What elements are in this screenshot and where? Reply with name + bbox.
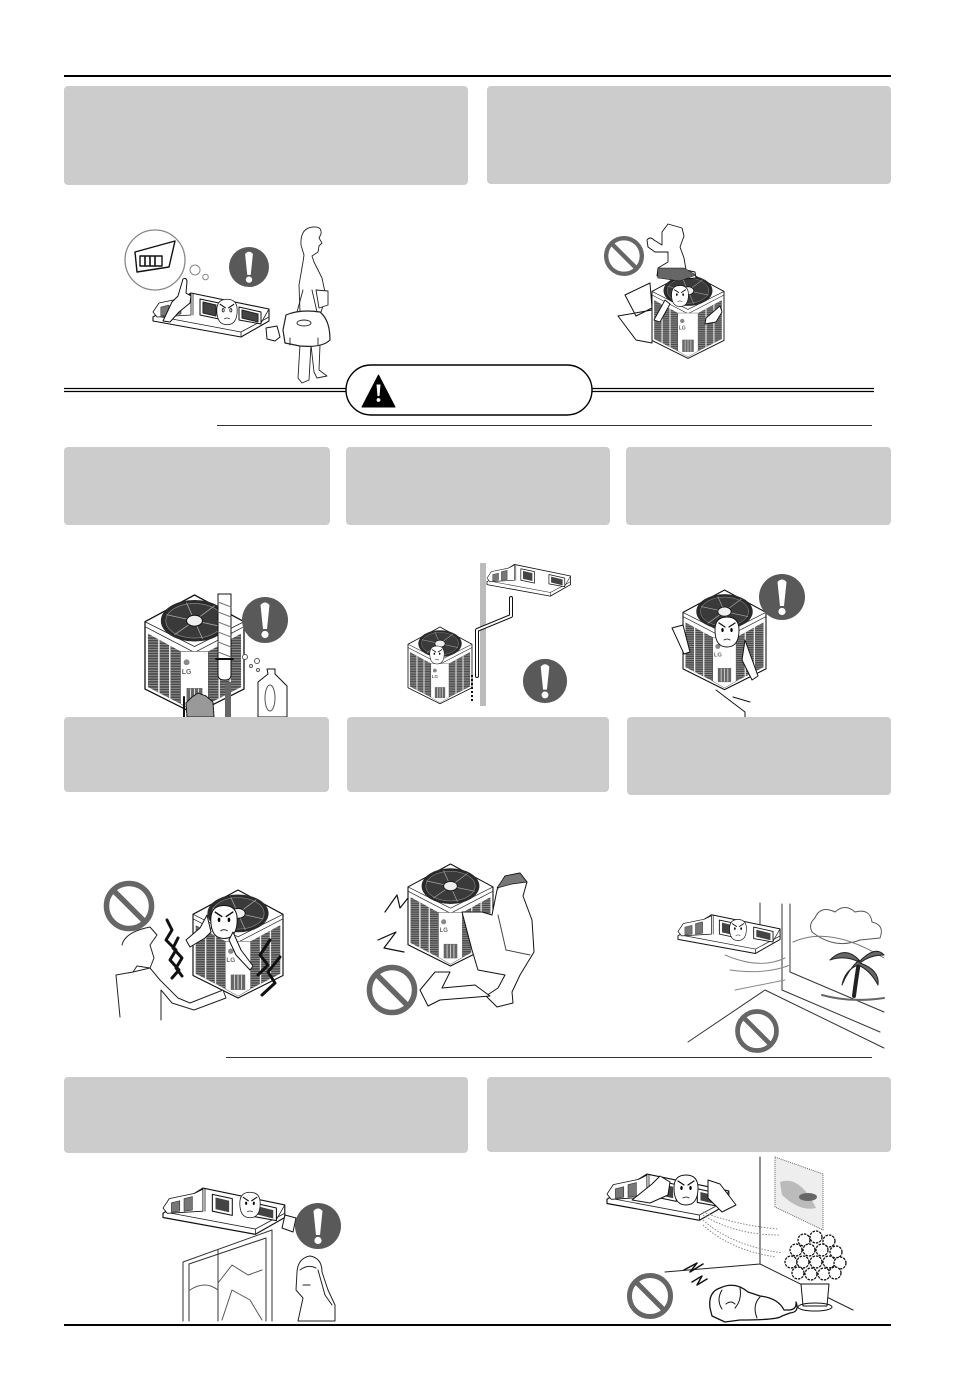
panel: bottom left text box [64,1077,468,1153]
outdoor unit [145,595,244,714]
woman with bag [283,227,330,383]
pipe [477,598,511,676]
ground wire [716,690,750,717]
indoor unit [607,1174,729,1220]
child [647,224,696,280]
bottom rule [64,1324,891,1326]
icon: prohibited sign [738,1012,776,1050]
outdoor unit [683,590,766,690]
room corner [665,1157,853,1310]
illustration: indoor unit and woman at window [163,1188,335,1321]
illustration: indoor unit blowing at sleeping dog and plant [607,1157,853,1322]
icon: warning triangle [362,375,395,407]
outdoor unit [408,627,472,704]
wind lines [725,955,790,990]
divider: double rule right [592,388,874,392]
indoor unit [487,564,571,596]
panel: row 2 right [626,447,891,525]
panel: row 3 middle [347,717,609,792]
icon: prohibited sign [106,883,152,929]
icon: mandatory exclamation [242,597,288,643]
arms [672,625,758,680]
panel: top left text box [64,86,468,185]
woman [296,1256,335,1321]
illustration: wall mounted piping between units [408,563,571,706]
icon: mandatory exclamation [229,247,269,287]
plants [186,693,214,717]
top rule [64,75,891,77]
pipe [218,594,231,680]
illustration: outdoor unit washed with pipe and detergent [145,594,287,717]
man [116,927,157,1017]
snore marks [684,1263,707,1285]
illustration: serviceman lifting outdoor unit [378,864,534,1007]
indoor unit character [153,278,280,341]
divider: double rule left [64,388,346,392]
serviceman [462,873,534,1007]
outdoor unit [652,272,724,358]
icon: mandatory exclamation [759,574,805,620]
indoor unit [678,915,780,953]
panel: row 2 middle [346,447,610,525]
window frame [183,1230,272,1321]
air lines [703,1212,782,1257]
plant [785,1231,846,1311]
illustration: man touching noisy outdoor unit [116,890,283,1020]
illustration: outdoor unit grounded [672,590,766,717]
vibration zigzags [166,920,182,978]
poster [775,1157,823,1230]
icon: mandatory exclamation [523,659,567,703]
panel: row 2 left [64,447,330,525]
wall [480,563,486,706]
caution pill [346,365,592,415]
illustration: indoor unit with switch thought and woman leaving [125,227,330,383]
outdoor unit [408,864,493,966]
panel: row 3 right [627,717,891,795]
sleeping dog [710,1285,797,1322]
indoor unit [163,1188,285,1234]
cloud and hill [811,908,881,944]
icon: prohibited sign [369,967,415,1013]
character face and hands [672,286,688,306]
impact lines [378,895,408,952]
icon: prohibited sign [630,1276,670,1316]
thought bubble with switch [125,230,208,290]
panel: top right text box [487,86,891,184]
icon: prohibited sign [606,238,642,274]
detergent bottle and bubbles [258,669,287,717]
palm tree [854,962,859,996]
room corner and window [688,903,884,1048]
panel: row 3 left [64,717,329,792]
boxes [618,283,652,343]
illustration: child sitting on outdoor unit with boxes [618,224,724,358]
illustration: indoor unit blowing beside window with palm [678,903,884,1048]
section rule [226,1057,872,1058]
panel: bottom right text box [487,1077,891,1152]
icon: mandatory exclamation [295,1203,341,1249]
section rule [217,425,872,426]
outdoor unit [193,890,283,998]
